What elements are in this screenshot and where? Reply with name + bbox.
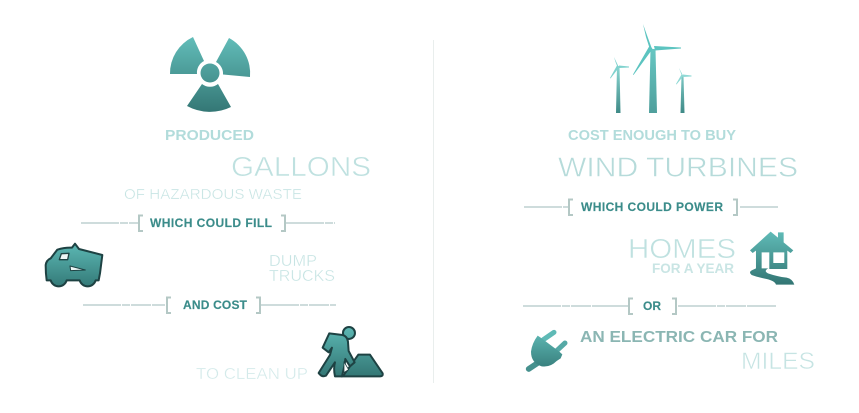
divider label: and cost	[83, 298, 336, 313]
heading: produced: PRODUCED	[165, 128, 254, 144]
text: homes for a year: HOMES	[628, 233, 736, 264]
text: wind turbines: WIND TURBINES	[558, 152, 798, 182]
divider: central rule	[432, 40, 434, 383]
text: of hazardous waste: OF HAZARDOUS WASTE	[124, 186, 302, 203]
divider label: or: OR	[643, 299, 661, 313]
icon: dump truck	[46, 244, 102, 286]
divider label: which could fill	[81, 216, 335, 231]
text: dump trucks: TRUCKS	[269, 268, 335, 285]
text: to clean up: TO CLEAN UP	[196, 366, 308, 383]
text: dump trucks: DUMP	[269, 253, 317, 270]
text: an electric car for: AN ELECTRIC CAR FOR	[580, 329, 778, 346]
icon: worker shovelling	[319, 327, 383, 376]
text: homes for a year: FOR A YEAR	[652, 261, 734, 276]
divider label: which could power	[524, 200, 778, 215]
divider label: which could fill: WHICH COULD FILL	[150, 216, 272, 230]
icon: wind turbines	[610, 24, 692, 113]
panel: wind turbine alternative	[523, 24, 815, 375]
icon: electric plug	[529, 332, 565, 369]
text: homes for a year	[628, 233, 736, 276]
icon: house with path	[750, 232, 794, 285]
text: dump trucks	[269, 253, 335, 285]
heading: cost enough to buy: COST ENOUGH TO BUY	[568, 128, 736, 144]
panel: waste produced	[46, 37, 383, 383]
divider label: which could power: WHICH COULD POWER	[581, 200, 723, 214]
divider label: or	[523, 298, 776, 314]
divider label: and cost: AND COST	[183, 298, 248, 312]
text: gallons: GALLONS	[231, 151, 371, 182]
text: miles: MILES	[741, 348, 815, 375]
icon: radiation symbol	[170, 37, 250, 112]
